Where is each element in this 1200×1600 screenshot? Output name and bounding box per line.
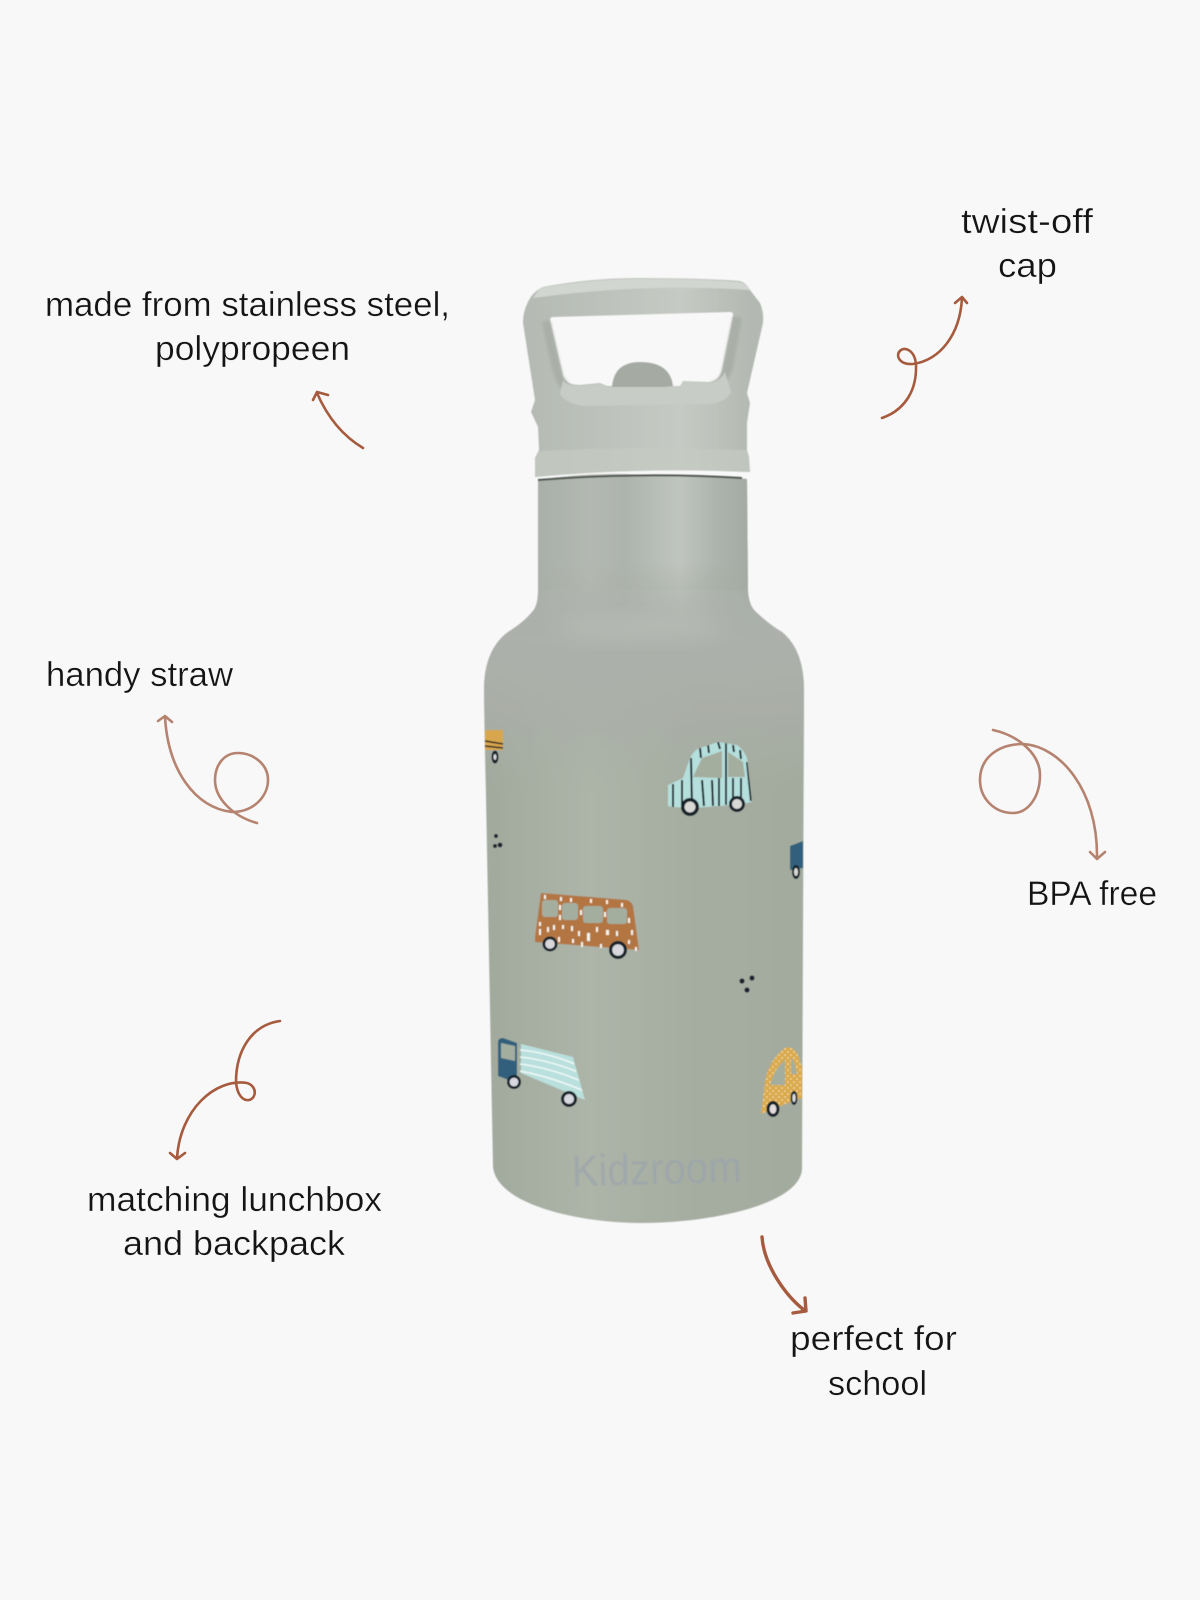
blue truck at right edge bbox=[790, 841, 803, 879]
small marks left bbox=[493, 834, 502, 848]
delivery truck bbox=[498, 1038, 585, 1107]
callout: lunchbox bbox=[87, 1021, 382, 1263]
label: cap: cap bbox=[998, 247, 1057, 285]
label: lunchbox: matching lunchbox bbox=[87, 1181, 382, 1219]
arrow: straw bbox=[158, 716, 268, 823]
label: material: made from stainless steel, bbox=[45, 286, 450, 324]
label: straw: handy straw bbox=[46, 656, 233, 694]
striped car bbox=[668, 742, 752, 816]
infographic: bottle with feature callouts bbox=[47, 208, 1156, 1396]
bottle body bbox=[484, 474, 804, 1223]
arrow: material bbox=[313, 392, 363, 448]
bus bbox=[535, 893, 639, 959]
arrow: cap bbox=[882, 297, 967, 418]
cap band bbox=[535, 448, 750, 477]
bottle bbox=[484, 278, 804, 1223]
handle inner grooves bbox=[542, 316, 742, 388]
logo: Kidzroom bbox=[571, 1143, 742, 1196]
callout: cap bbox=[882, 203, 1094, 418]
car: left edge yellow truck bbox=[485, 730, 503, 764]
label: cap: twist-off bbox=[961, 203, 1094, 241]
arrow: lunchbox bbox=[170, 1021, 280, 1159]
shoulder shading bbox=[484, 590, 804, 790]
shoulder highlight bbox=[555, 618, 725, 638]
arrow: school bbox=[762, 1237, 806, 1313]
label: material bbox=[45, 286, 450, 368]
cap handle top highlight bbox=[533, 279, 750, 298]
label: school: perfect for bbox=[790, 1320, 957, 1358]
label: school: school bbox=[828, 1365, 927, 1403]
straw tip bbox=[612, 362, 673, 388]
label: lunchbox bbox=[87, 1181, 382, 1263]
label: material: polypropeen bbox=[155, 330, 350, 368]
label: cap bbox=[961, 203, 1094, 285]
label: BPA: BPA free bbox=[1027, 875, 1157, 913]
cap bbox=[523, 278, 763, 477]
callout: school bbox=[762, 1237, 957, 1403]
callout: BPA bbox=[980, 730, 1157, 913]
callout: straw bbox=[46, 656, 268, 823]
label: school bbox=[790, 1320, 957, 1403]
neck bbox=[561, 476, 728, 602]
yellow car bbox=[761, 1047, 802, 1117]
callout: material bbox=[45, 286, 450, 448]
small marks right bbox=[739, 975, 755, 993]
hole lower lip bbox=[560, 372, 731, 406]
label: lunchbox: and backpack bbox=[123, 1225, 346, 1263]
arrow: BPA bbox=[980, 730, 1105, 859]
cap gap bbox=[538, 475, 742, 480]
